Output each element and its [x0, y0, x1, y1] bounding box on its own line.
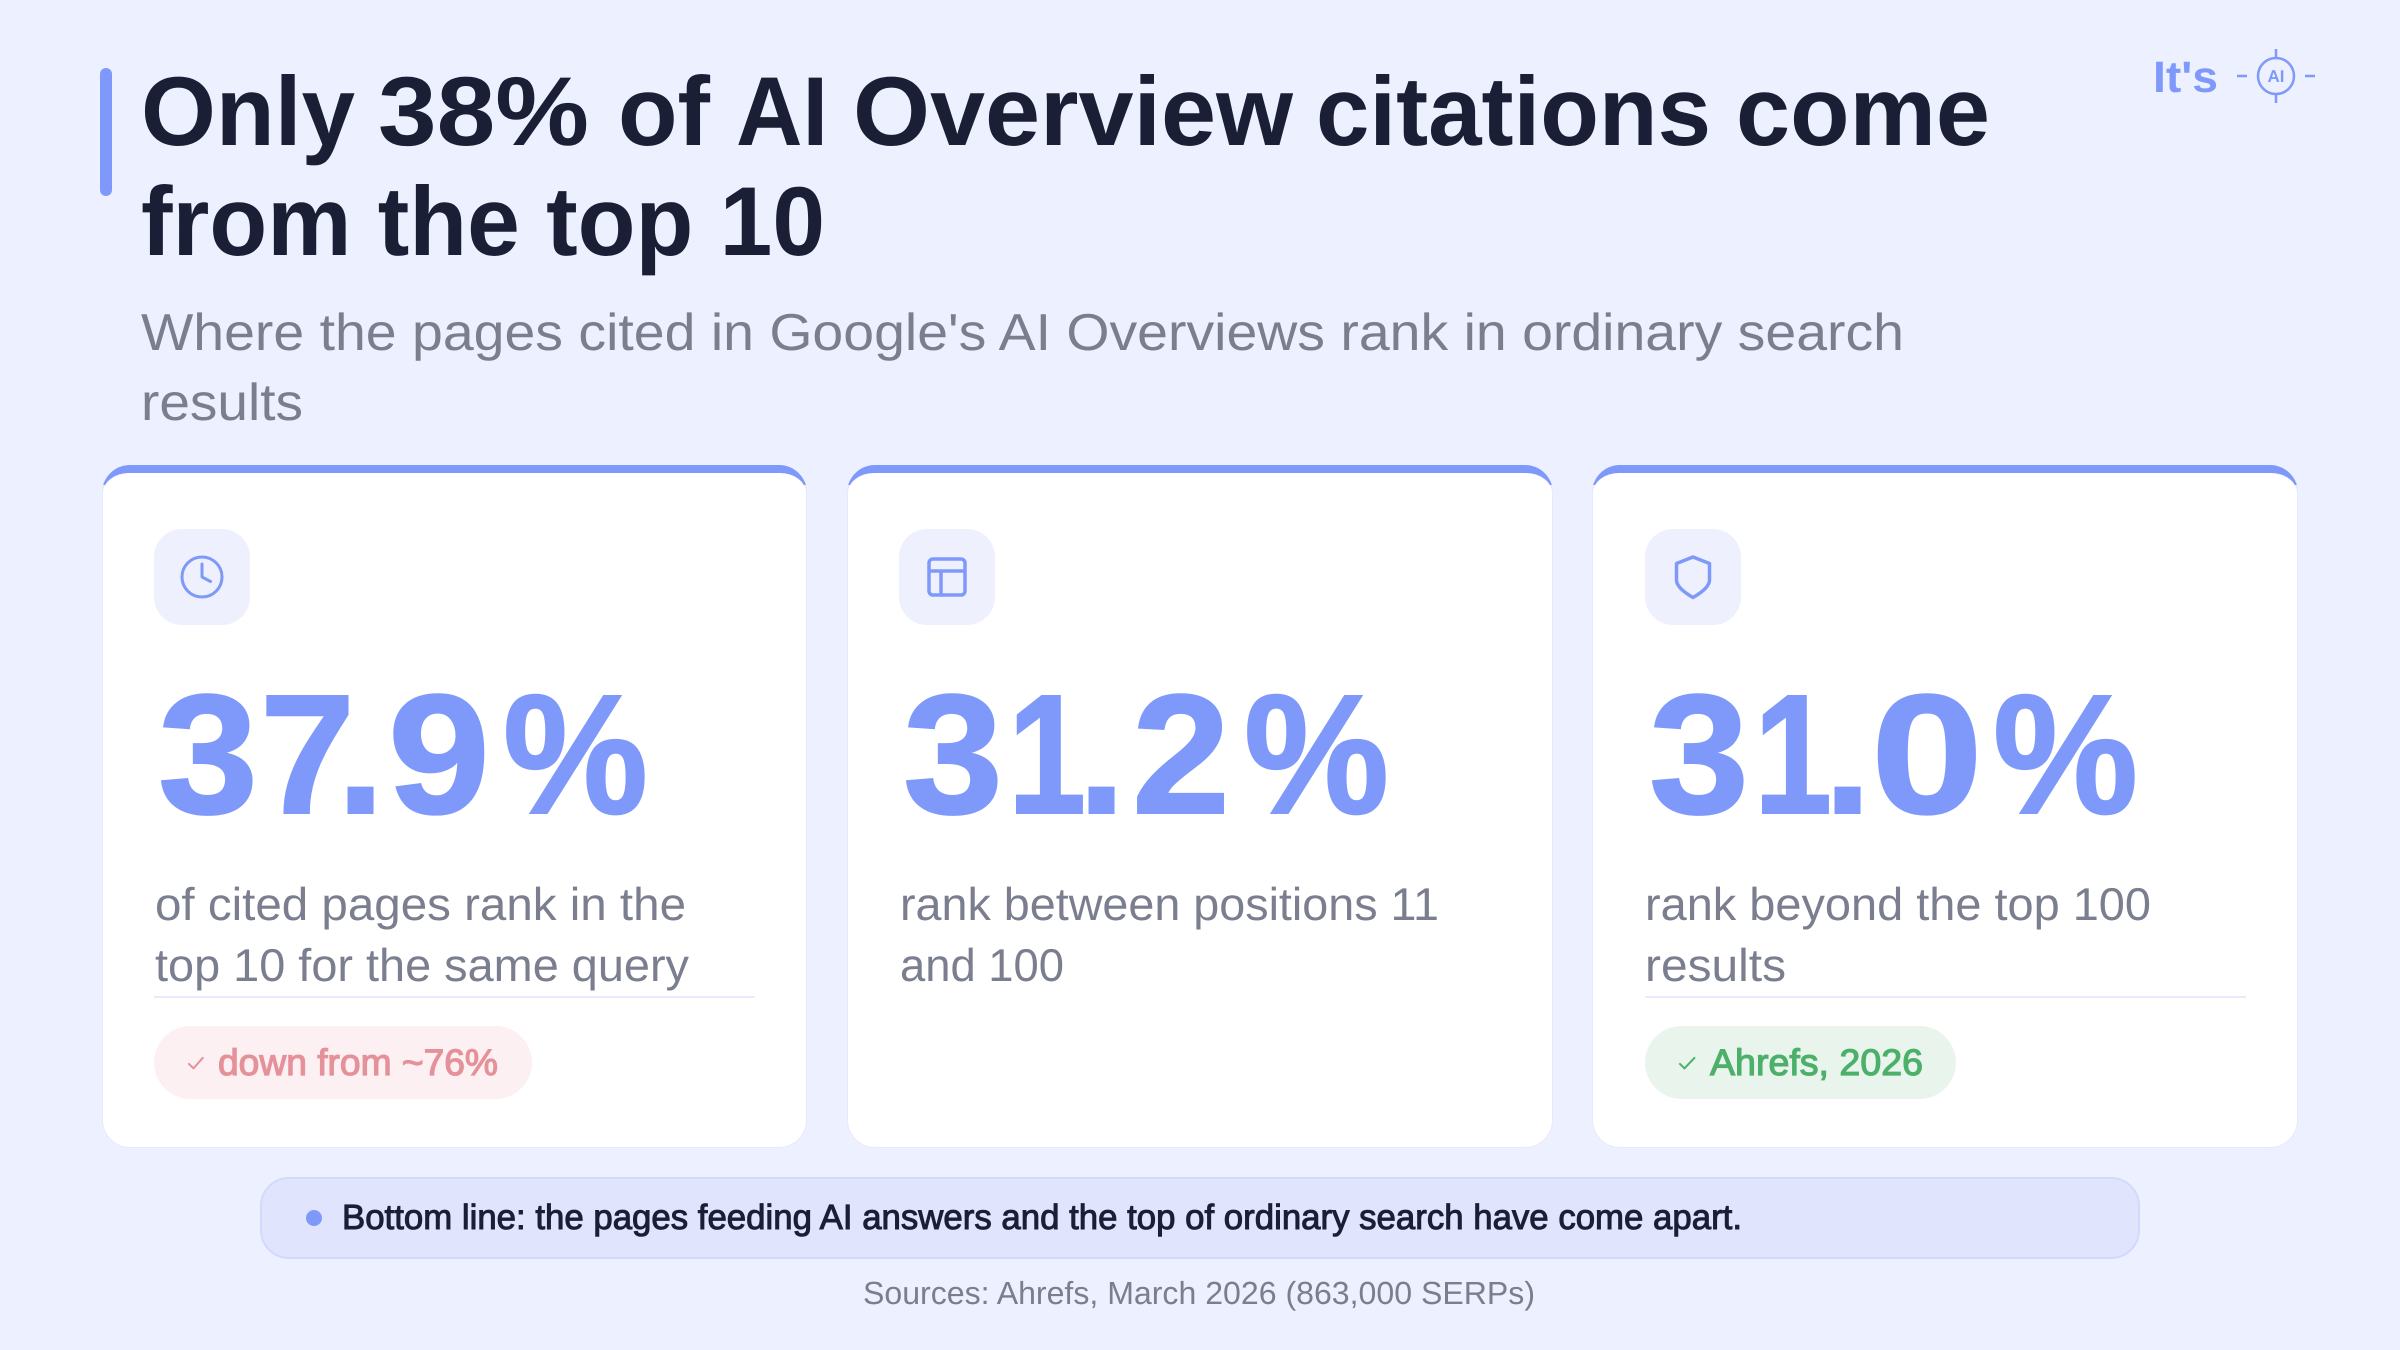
stat: 31.0%: 3	[1649, 660, 1749, 850]
stat: 31.0%	[1649, 660, 2138, 850]
title: from the top 10	[141, 166, 825, 276]
title accent bar	[100, 68, 112, 196]
stat: 37.9%: 9	[388, 660, 490, 850]
stat: 31.2%: 2	[1132, 660, 1230, 850]
description: card 1: top 10 for the same query	[155, 939, 689, 991]
stat: 37.9%: %	[503, 660, 648, 850]
description: card 2: and 100	[900, 939, 1064, 991]
title: 38%	[378, 56, 589, 166]
logo: It's AI	[2153, 49, 2315, 103]
title: citations	[1316, 56, 1711, 166]
stat: 37.9%: .	[337, 660, 384, 850]
subtitle	[141, 304, 1904, 432]
panel: card 3, beyond top 100	[1592, 465, 2298, 1148]
panel: card 2, positions 11 to 100	[847, 465, 1553, 1148]
stat: 37.9%: 3	[158, 660, 258, 850]
title	[141, 56, 1990, 276]
stat: 37.9%	[158, 660, 648, 850]
stat: 31.0%: 1	[1754, 660, 1832, 850]
stat: 31.0%: %	[1993, 660, 2138, 850]
pill: down from ~76%: down from ~76%	[218, 1042, 498, 1083]
subtitle: results	[141, 374, 303, 432]
description: card 2: rank between positions 11	[900, 878, 1439, 930]
pill: Ahrefs, 2026	[1645, 1026, 1956, 1099]
title: come	[1736, 56, 1990, 166]
description: card 1	[155, 878, 689, 991]
stat: 31.2%: 1	[1008, 660, 1086, 850]
description: card 2	[900, 878, 1439, 991]
stat: 31.2%: 3	[903, 660, 1003, 850]
description: card 3: results	[1645, 939, 1786, 991]
title: AI	[736, 56, 828, 166]
callout: bottom line: Bottom line: the pages feeding AI answers and the top of ordinary search have come apart.	[342, 1198, 1742, 1237]
stat: 31.0%: .	[1824, 660, 1871, 850]
subtitle: Where the pages cited in Google's AI Overviews rank in ordinary search	[141, 304, 1904, 362]
description: card 3: rank beyond the top 100	[1645, 878, 2151, 930]
stat: 31.2%	[903, 660, 1389, 850]
panel: card 1, top 10 share	[102, 465, 807, 1148]
description: card 3	[1645, 878, 2151, 991]
stat: 37.9%: 7	[260, 660, 355, 850]
icon: shield	[1645, 529, 1741, 625]
icon: clock	[154, 529, 250, 625]
icon: layout	[899, 529, 995, 625]
callout: bottom line	[261, 1178, 2139, 1258]
stat: 31.2%: %	[1244, 660, 1389, 850]
pill: Ahrefs, 2026: Ahrefs, 2026	[1710, 1042, 1923, 1083]
stat: 31.0%: 0	[1871, 660, 1983, 850]
title: of	[618, 56, 710, 166]
logo: It's AI: AI	[2268, 67, 2284, 86]
stat: 31.2%: .	[1078, 660, 1125, 850]
logo: It's AI: It's	[2153, 53, 2218, 102]
pill: down from ~76%	[154, 1026, 532, 1099]
description: card 1: of cited pages rank in the	[155, 878, 686, 930]
sources: Sources: Ahrefs, March 2026 (863,000 SERPs)	[863, 1275, 1535, 1311]
title: Overview	[853, 56, 1294, 166]
title: Only	[141, 56, 355, 166]
